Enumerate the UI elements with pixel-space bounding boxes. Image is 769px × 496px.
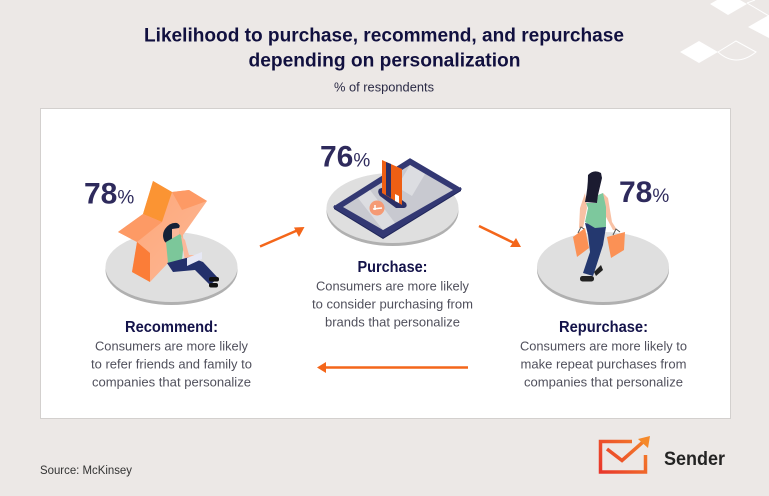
title: depending on personalization xyxy=(248,50,520,72)
text: purchase description: Consumers are more likely xyxy=(316,278,470,294)
text: purchase description: brands that personalize xyxy=(325,314,460,330)
title xyxy=(144,24,624,72)
panel: purchase xyxy=(312,140,473,330)
icon: woman with shopping bags xyxy=(573,171,625,282)
text: repurchase description: companies that personalize xyxy=(524,374,683,390)
heading: recommend: Recommend: xyxy=(125,319,218,336)
subtitle: % of respondents xyxy=(334,80,434,94)
heading: purchase: Purchase: xyxy=(358,259,428,276)
text: repurchase description: make repeat purchases from xyxy=(520,356,686,372)
arrow: purchase to repurchase xyxy=(479,226,521,247)
panel: recommend xyxy=(84,178,252,390)
text: recommend description: companies that personalize xyxy=(92,374,251,390)
text: repurchase description: Consumers are more likely to xyxy=(520,338,687,354)
text: purchase description: to consider purchasing from xyxy=(312,296,473,312)
decorative diamonds xyxy=(680,0,769,63)
icon: phone with card xyxy=(334,159,461,239)
disc: repurchase xyxy=(537,232,669,305)
disc: purchase xyxy=(326,173,458,246)
text: repurchase description xyxy=(520,338,687,390)
icon: envelope with arrow xyxy=(600,436,650,472)
text: recommend description: to refer friends and family to xyxy=(91,356,252,372)
main panel xyxy=(40,108,730,418)
source note: Source: McKinsey xyxy=(40,465,132,477)
disc: recommend xyxy=(106,232,238,305)
logo: Sender xyxy=(600,436,725,472)
text: recommend description: Consumers are more likely xyxy=(95,338,249,354)
arrow: recommend to purchase xyxy=(260,227,304,246)
icon: woman with laptop xyxy=(163,223,219,288)
heading: repurchase: Repurchase: xyxy=(559,319,648,336)
text: recommend description xyxy=(91,338,252,390)
stat: 78% recommend: 78% xyxy=(84,178,134,210)
stat: 76% purchase: 76% xyxy=(320,140,370,174)
wordmark: Sender xyxy=(664,448,725,470)
stat: 78% repurchase: 78% xyxy=(619,176,669,209)
panel: repurchase xyxy=(520,171,687,390)
icon: orange star xyxy=(118,181,207,282)
text: purchase description xyxy=(312,278,473,330)
arrow: repurchase to recommend xyxy=(317,362,468,373)
title: Likelihood to purchase, recommend, and repurchase xyxy=(144,24,624,46)
